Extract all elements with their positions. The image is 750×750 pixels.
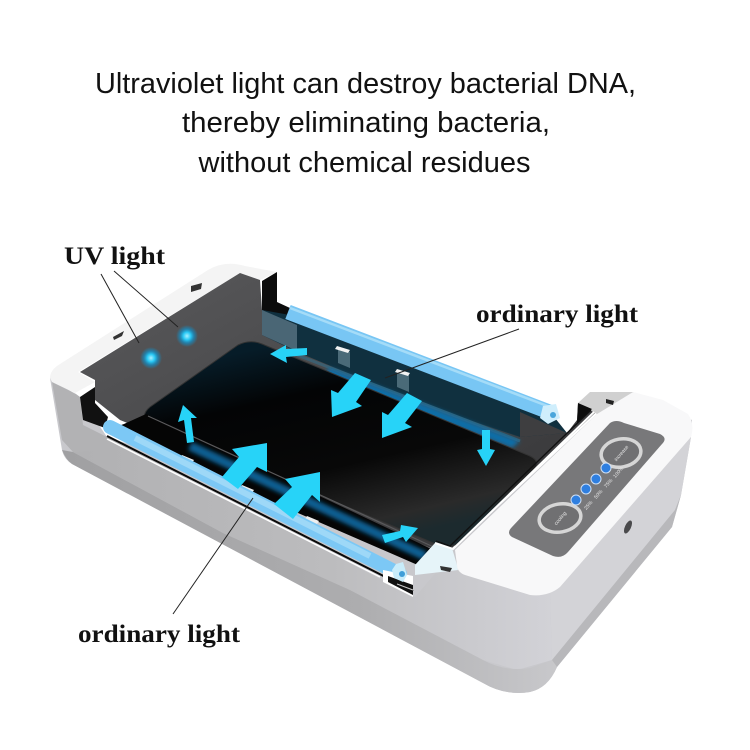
lamp end socket	[383, 562, 413, 597]
control panel	[509, 421, 665, 557]
top plate	[455, 392, 692, 595]
level labels: 100%	[612, 465, 626, 479]
label: ordinary light (rear lamp)	[385, 301, 639, 378]
label: ordinary light (front lamp): ordinary light	[78, 621, 241, 648]
light direction arrows	[178, 345, 495, 543]
interior tray	[80, 273, 595, 552]
level labels: 25%	[583, 499, 595, 511]
rear lamp tube	[288, 308, 560, 424]
front trough	[107, 414, 440, 566]
rear tabs	[335, 346, 350, 353]
label: UV light	[64, 243, 178, 343]
cooling button: cooling	[553, 510, 568, 527]
left black notch	[80, 387, 108, 428]
title: without chemical residues	[197, 147, 531, 179]
title	[95, 68, 636, 179]
phone	[144, 342, 537, 547]
level labels: 50%	[593, 488, 605, 500]
rear wall panels	[262, 310, 567, 437]
UV light LEDs	[140, 325, 198, 369]
increase button	[599, 436, 643, 470]
title: thereby eliminating bacteria,	[182, 107, 550, 139]
cooling button	[537, 501, 583, 535]
front lamp edge lines	[107, 436, 413, 591]
left grey end	[52, 382, 107, 452]
label: UV light: UV light	[64, 243, 166, 270]
plate rim lines	[435, 412, 594, 549]
rear blue glow band	[322, 368, 520, 448]
title: Ultraviolet light can destroy bacterial DNA,	[95, 68, 636, 100]
increase button: increase	[613, 444, 630, 463]
level labels	[583, 465, 626, 511]
small slot	[440, 566, 452, 572]
rear right wedge	[578, 392, 633, 414]
label: ordinary light (rear lamp): ordinary light	[476, 301, 639, 328]
rim marks	[113, 331, 124, 340]
side port	[622, 519, 634, 535]
front tray tabs	[180, 455, 319, 524]
level indicator dots	[571, 463, 611, 505]
level labels: 75%	[603, 477, 615, 489]
front side lower band	[62, 450, 557, 693]
device: UV sterilizer box	[50, 264, 692, 693]
right side lower band	[552, 495, 681, 667]
label: ordinary light (front lamp)	[78, 498, 253, 648]
right black notch behind rear lamp	[262, 272, 290, 318]
back white rim	[50, 264, 277, 393]
rear ledge	[297, 355, 520, 441]
right side face	[550, 437, 691, 660]
device body silhouette	[50, 378, 692, 693]
front lamp tube	[110, 427, 400, 574]
front trough blue glow	[190, 446, 425, 556]
end block	[415, 543, 458, 575]
front side upper band	[60, 420, 552, 670]
